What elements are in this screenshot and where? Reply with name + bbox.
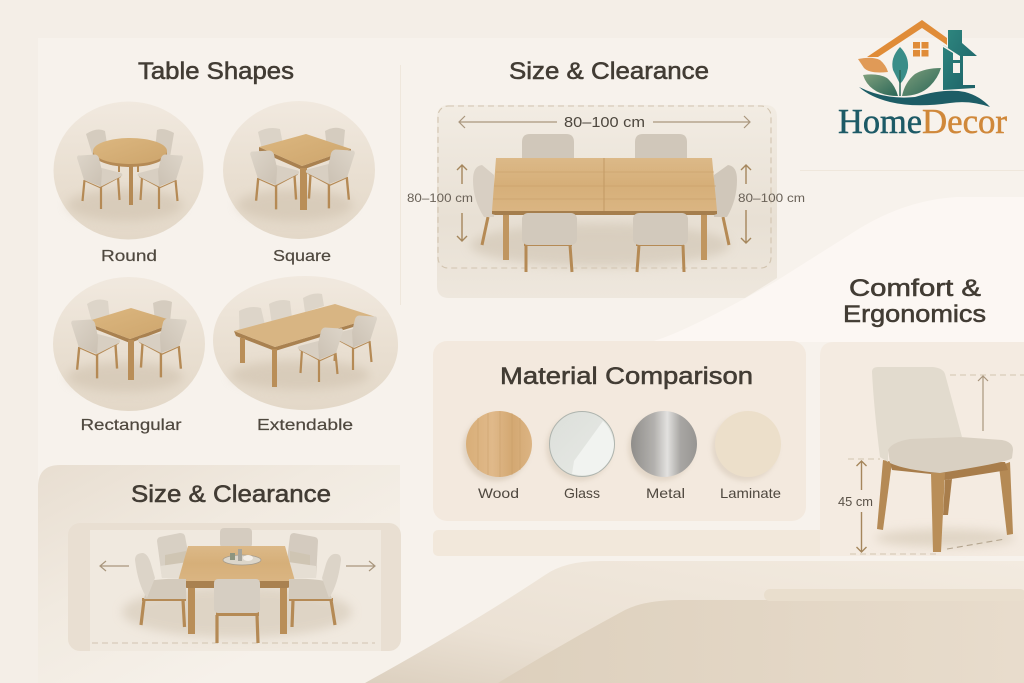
lower left panel background (38, 465, 400, 683)
middle-right light shape (650, 197, 1024, 342)
heading: Size & Clearance: Size & Clearance (131, 481, 331, 508)
seat height dimension (838, 459, 940, 554)
label: Square: Square (273, 248, 331, 265)
back chairs (220, 528, 252, 548)
panel: comfort and ergonomics (820, 275, 1024, 556)
swatch: wood (463, 411, 532, 481)
right clearance dimension: 80–100 cm (738, 191, 805, 205)
icon: window (913, 42, 928, 56)
vertical divider (400, 65, 401, 305)
heading: Comfort & Ergonomics (843, 275, 986, 328)
panel: material comparison (433, 341, 806, 521)
heading: Table Shapes: Table Shapes (138, 58, 294, 85)
front chair (214, 579, 260, 643)
icon: orange leaf (858, 58, 888, 72)
icon: right leaf (902, 68, 941, 96)
label: Round: Round (101, 248, 157, 265)
back height dimension (950, 375, 1024, 431)
label: Metal: Metal (646, 485, 685, 501)
swatch: glass (546, 412, 614, 481)
icon: stem (899, 70, 901, 96)
floor shadow (875, 529, 1015, 547)
table with six chairs (473, 134, 737, 272)
extendable table illustration (213, 276, 398, 410)
table legs (188, 585, 195, 634)
label: Wood: Wood (478, 485, 519, 501)
chair illustration (872, 367, 1013, 552)
top width dimension (459, 114, 750, 131)
label: Extendable: Extendable (257, 417, 353, 434)
lower strip under material panel (433, 530, 833, 556)
icon: left leaf (863, 74, 898, 96)
room diagram (68, 523, 401, 651)
round table illustration (54, 102, 204, 240)
top width dimension: 80–100 cm (564, 114, 645, 131)
panel: size and clearance top (407, 58, 805, 298)
icon: swoosh (859, 87, 990, 107)
seat depth dimension (947, 539, 1005, 549)
arrow right (346, 561, 375, 571)
left chair (135, 553, 186, 627)
arrow left (100, 561, 129, 571)
heading: Size & Clearance: Size & Clearance (509, 58, 709, 85)
clearance zone (437, 105, 777, 298)
bottom sweep light shape (365, 561, 1024, 683)
left clearance dimension: 80–100 cm (407, 191, 473, 205)
left clearance dimension (407, 165, 473, 241)
tray (223, 549, 261, 565)
logo: HomeDecor (838, 20, 1007, 141)
wordmark: HomeDecor (838, 102, 1007, 141)
icon: center leaf (892, 47, 908, 84)
panel: table shapes (53, 58, 398, 434)
right clearance dimension (738, 165, 805, 243)
heading: Comfort & Ergonomics: Comfort & (849, 275, 981, 302)
dashed clearance line (92, 642, 375, 644)
icon: roof (867, 20, 947, 57)
icon: house tower (943, 30, 977, 90)
swatch: metal (628, 411, 697, 481)
bottom sweep dark shape (498, 600, 1024, 683)
table top (178, 581, 295, 588)
heading: Comfort & Ergonomics: Ergonomics (843, 301, 986, 328)
panel: size and clearance bottom (68, 481, 401, 651)
label: Glass: Glass (564, 485, 600, 501)
top-right light band (800, 170, 1024, 171)
bottom strip (764, 589, 1024, 601)
label: Laminate: Laminate (720, 485, 781, 501)
rectangular table illustration (53, 277, 205, 411)
heading: Material Comparison: Material Comparison (500, 363, 753, 390)
right chair (289, 554, 341, 627)
label: Rectangular: Rectangular (80, 417, 182, 434)
seat height dimension: 45 cm (838, 495, 873, 509)
square table illustration (223, 101, 375, 239)
swatch: laminate (712, 411, 781, 481)
